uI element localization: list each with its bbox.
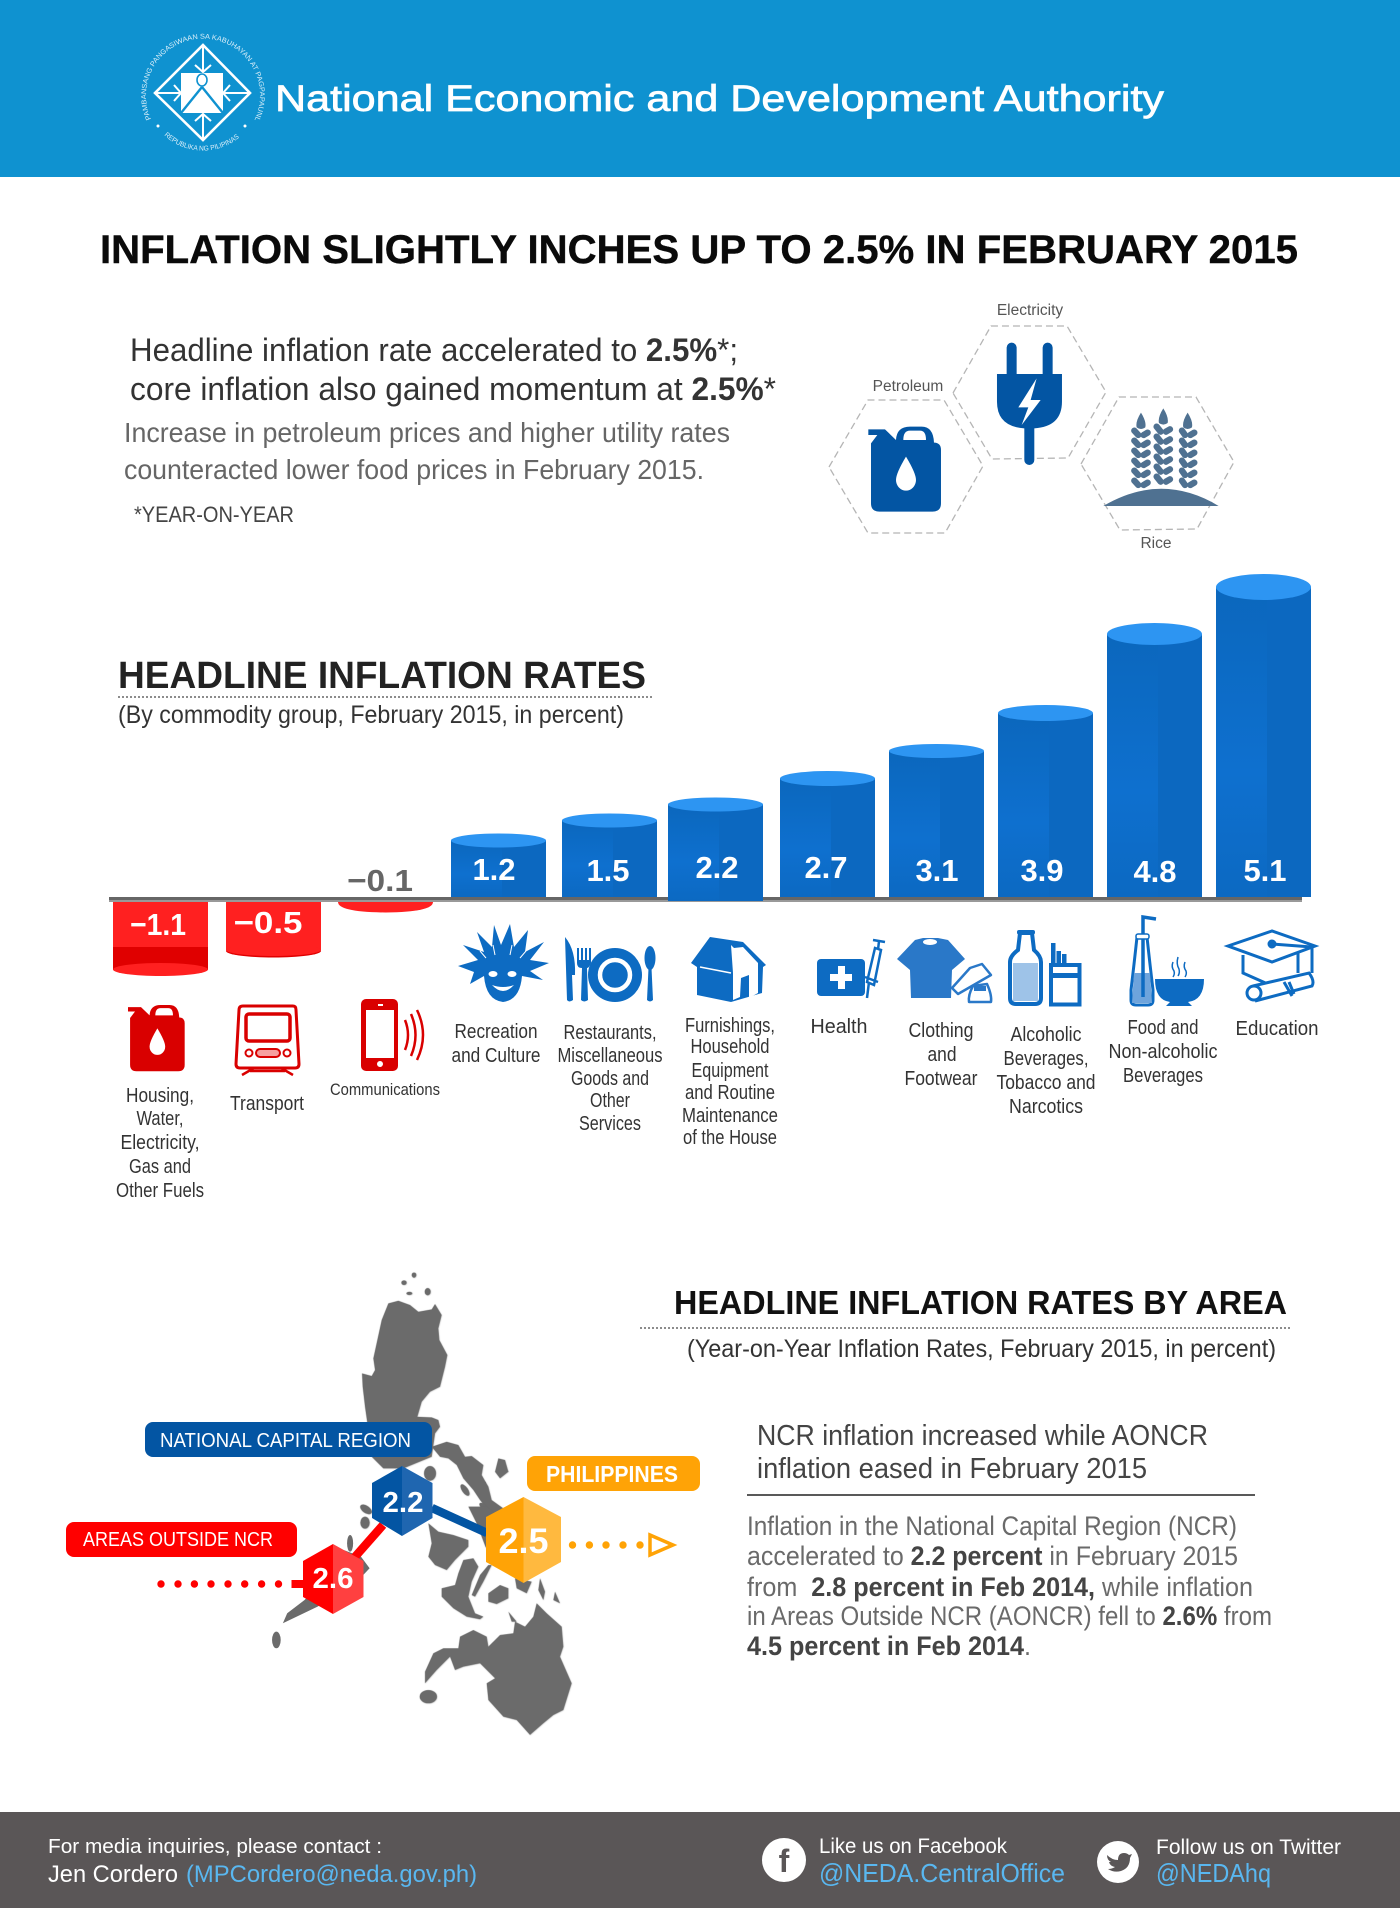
category: housing: Water, [136, 1108, 184, 1130]
label: philippines [527, 1456, 700, 1491]
main title: INFLATION SLIGHTLY INCHES UP TO 2.5% IN FEBRUARY 2015 [100, 228, 1298, 272]
facebook link [819, 1835, 1065, 1888]
bar: food 4.8 [1107, 623, 1202, 897]
bar: health 2.7 [780, 771, 875, 897]
arrow: orange dotted leader [569, 1535, 673, 1555]
category: furnishings: and Routine [685, 1082, 775, 1104]
heading: headline inflation rates [118, 655, 654, 729]
category: restaurants: Other [590, 1090, 630, 1112]
intro text block: counteracted lower food prices in February 2015. [124, 454, 704, 485]
bar: communications -0.1 [338, 863, 433, 912]
area commentary paragraph: Inflation in the National Capital Region (NCR) [747, 1511, 1237, 1541]
bar: transport -0.5: −0.5 [234, 905, 302, 940]
area commentary paragraph: from 2.8 percent in Feb 2014, while inflation [747, 1572, 1253, 1602]
intro text block [124, 332, 776, 527]
category: alcoholic beverages: Narcotics [1009, 1096, 1083, 1118]
hexagon: rice: Rice [1140, 535, 1172, 552]
price driver hexagons [829, 302, 1234, 552]
footer band [0, 1812, 1400, 1908]
category: alcoholic beverages [996, 930, 1096, 1118]
category: clothing: and [928, 1044, 956, 1066]
category: housing: Housing, [126, 1085, 194, 1107]
hexagon: NCR 2.2 [372, 1466, 432, 1536]
logo: NEDA seal: REPUBLIKA NG PILIPINAS [164, 132, 239, 151]
area commentary paragraph: 4.5 percent in Feb 2014. [747, 1631, 1031, 1661]
category: recreation: and Culture [452, 1045, 540, 1067]
category: transport [230, 1006, 304, 1115]
category: food: Food and [1128, 1017, 1198, 1039]
area commentary paragraph: accelerated to 2.2 percent in February 2015 [747, 1541, 1238, 1571]
icon: facebook: f [779, 1843, 790, 1879]
label: philippines: PHILIPPINES [546, 1461, 678, 1487]
area commentary heading: inflation eased in February 2015 [757, 1453, 1147, 1485]
category: food [1108, 917, 1218, 1087]
bar: clothing 3.1 [889, 744, 984, 897]
category: transport: Transport [230, 1093, 304, 1115]
hexagon: NCR 2.2: 2.2 [382, 1487, 424, 1519]
hexagon: rice [1081, 397, 1234, 552]
heading: rates by area [640, 1284, 1292, 1363]
hexagon: areas outside NCR 2.6 [303, 1544, 364, 1614]
area commentary heading [747, 1420, 1255, 1495]
bar: housing -1.1 [113, 902, 208, 976]
bar: restaurants 1.5 [562, 814, 657, 897]
category: communications: Communications [330, 1080, 440, 1099]
icon: train [236, 1006, 299, 1075]
bar chart: commodity groups [109, 574, 1311, 976]
icon: plate and cutlery [565, 937, 656, 1002]
facebook link: Like us on Facebook [819, 1835, 1007, 1858]
dotted leader: red [157, 1580, 304, 1588]
category: restaurants: Miscellaneous [558, 1045, 662, 1067]
category: restaurants: Goods and [571, 1068, 649, 1090]
category: food: Beverages [1123, 1065, 1203, 1087]
bar: health 2.7: 2.7 [804, 850, 848, 885]
bar: furnishings 2.2 [668, 798, 763, 901]
hexagon: Philippines 2.5: 2.5 [498, 1522, 548, 1561]
bar: recreation 1.2: 1.2 [472, 852, 516, 887]
map: Philippines with area markers [66, 1272, 700, 1735]
category: furnishings: of the House [683, 1127, 777, 1149]
area commentary paragraph [747, 1511, 1272, 1661]
category: food: Non-alcoholic [1108, 1041, 1218, 1063]
area commentary paragraph: in Areas Outside NCR (AONCR) fell to 2.6% from [747, 1601, 1272, 1631]
connector lines [354, 1508, 487, 1558]
category: health [810, 940, 885, 1038]
category: restaurants: Restaurants, [564, 1022, 656, 1044]
area commentary heading: NCR inflation increased while AONCR [757, 1420, 1208, 1452]
category: furnishings: Household [690, 1036, 770, 1058]
intro text block: Increase in petroleum prices and higher utility rates [124, 417, 730, 448]
intro text block: *YEAR-ON-YEAR [134, 502, 294, 527]
header organisation name: National Economic and Development Authority [275, 78, 1165, 119]
media contact: For media inquiries, please contact : [48, 1836, 382, 1858]
category: furnishings: Maintenance [682, 1105, 778, 1127]
category: recreation [452, 924, 549, 1067]
bar: education 5.1: 5.1 [1243, 853, 1287, 888]
bar: restaurants 1.5: 1.5 [586, 853, 630, 888]
bar: food 4.8: 4.8 [1133, 854, 1177, 889]
map silhouette [358, 1272, 572, 1735]
media contact [48, 1836, 477, 1888]
category: recreation: Recreation [454, 1021, 538, 1043]
bar: alcoholic beverages 3.9 [998, 705, 1093, 897]
label: national capital region: NATIONAL CAPITAL REGION [160, 1430, 411, 1452]
category: housing: Gas and [129, 1156, 191, 1178]
bar: transport -0.5 [226, 902, 321, 958]
category: housing: Other Fuels [116, 1180, 204, 1202]
icon: bottle and cigarettes [1010, 930, 1080, 1004]
category: housing: Electricity, [120, 1132, 200, 1154]
heading: rates by area: (Year-on-Year Inflation Rates, February 2015, in percent) [687, 1335, 1276, 1363]
icon: first aid kit and syringe [817, 940, 885, 998]
icon: graduation cap and diploma [1228, 931, 1315, 1001]
heading: headline inflation rates: (By commodity group, February 2015, in percent) [118, 701, 624, 729]
category: furnishings [682, 937, 778, 1149]
hexagon: petroleum [829, 378, 983, 533]
facebook link: @NEDA.CentralOffice [819, 1858, 1065, 1888]
label: areas outside NCR [66, 1522, 297, 1557]
twitter link: @NEDAhq [1156, 1858, 1271, 1888]
heading: rates by area: HEADLINE INFLATION RATES BY AREA [674, 1284, 1287, 1321]
label: areas outside NCR: AREAS OUTSIDE NCR [83, 1529, 273, 1551]
intro text block: Headline inflation rate accelerated to 2.5%*; [130, 332, 738, 368]
category: clothing: Footwear [904, 1068, 978, 1090]
heading: headline inflation rates: HEADLINE INFLATION RATES [118, 655, 646, 697]
twitter link: Follow us on Twitter [1156, 1836, 1341, 1859]
icon: twitter [1097, 1841, 1139, 1883]
category: clothing: Clothing [908, 1020, 974, 1042]
hexagon: areas outside NCR 2.6: 2.6 [312, 1563, 354, 1595]
icon: house [691, 937, 766, 1002]
category: communications [330, 999, 440, 1099]
header band [0, 0, 1400, 177]
media contact: (MPCordero@neda.gov.ph) [186, 1861, 477, 1888]
label: national capital region [145, 1422, 432, 1457]
axis baseline [109, 897, 1302, 902]
intro text block: core inflation also gained momentum at 2.5%* [130, 371, 776, 407]
bar: alcoholic beverages 3.9: 3.9 [1020, 853, 1064, 888]
bar: housing -1.1: −1.1 [130, 907, 186, 942]
hexagon: Philippines 2.5 [486, 1497, 561, 1583]
icon: shirt and shoes [897, 938, 991, 1002]
category: alcoholic beverages: Alcoholic [1010, 1024, 1082, 1046]
icon: carnival mask [458, 924, 549, 1002]
category: furnishings: Equipment [692, 1060, 769, 1082]
bar: furnishings 2.2: 2.2 [695, 850, 739, 885]
bar: education 5.1 [1216, 574, 1311, 897]
twitter link [1156, 1836, 1341, 1888]
icon: soft drink and soup bowl [1131, 917, 1204, 1006]
category: alcoholic beverages: Beverages, [1004, 1048, 1088, 1070]
category: health: Health [810, 1016, 868, 1038]
category: restaurants [558, 937, 662, 1135]
category: education [1228, 931, 1318, 1040]
icon: red fuel can [128, 1005, 185, 1071]
category: housing [116, 1005, 204, 1202]
category: restaurants: Services [579, 1113, 641, 1135]
category: alcoholic beverages: Tobacco and [996, 1072, 1096, 1094]
hexagon: petroleum: Petroleum [873, 378, 943, 395]
hexagon: electricity: Electricity [997, 302, 1063, 319]
bar: communications -0.1: −0.1 [347, 863, 413, 898]
media contact: Jen Cordero [48, 1861, 178, 1888]
hexagon: electricity [953, 302, 1106, 465]
category: clothing [897, 938, 991, 1090]
category: furnishings: Furnishings, [685, 1015, 775, 1037]
icon: facebook [762, 1838, 806, 1882]
bar: recreation 1.2 [451, 834, 546, 897]
category: education: Education [1236, 1018, 1318, 1040]
icon: smartphone [361, 999, 423, 1071]
logo: NEDA seal [141, 34, 265, 151]
bar: clothing 3.1: 3.1 [915, 853, 959, 888]
Palawan island silhouette [272, 1535, 370, 1648]
